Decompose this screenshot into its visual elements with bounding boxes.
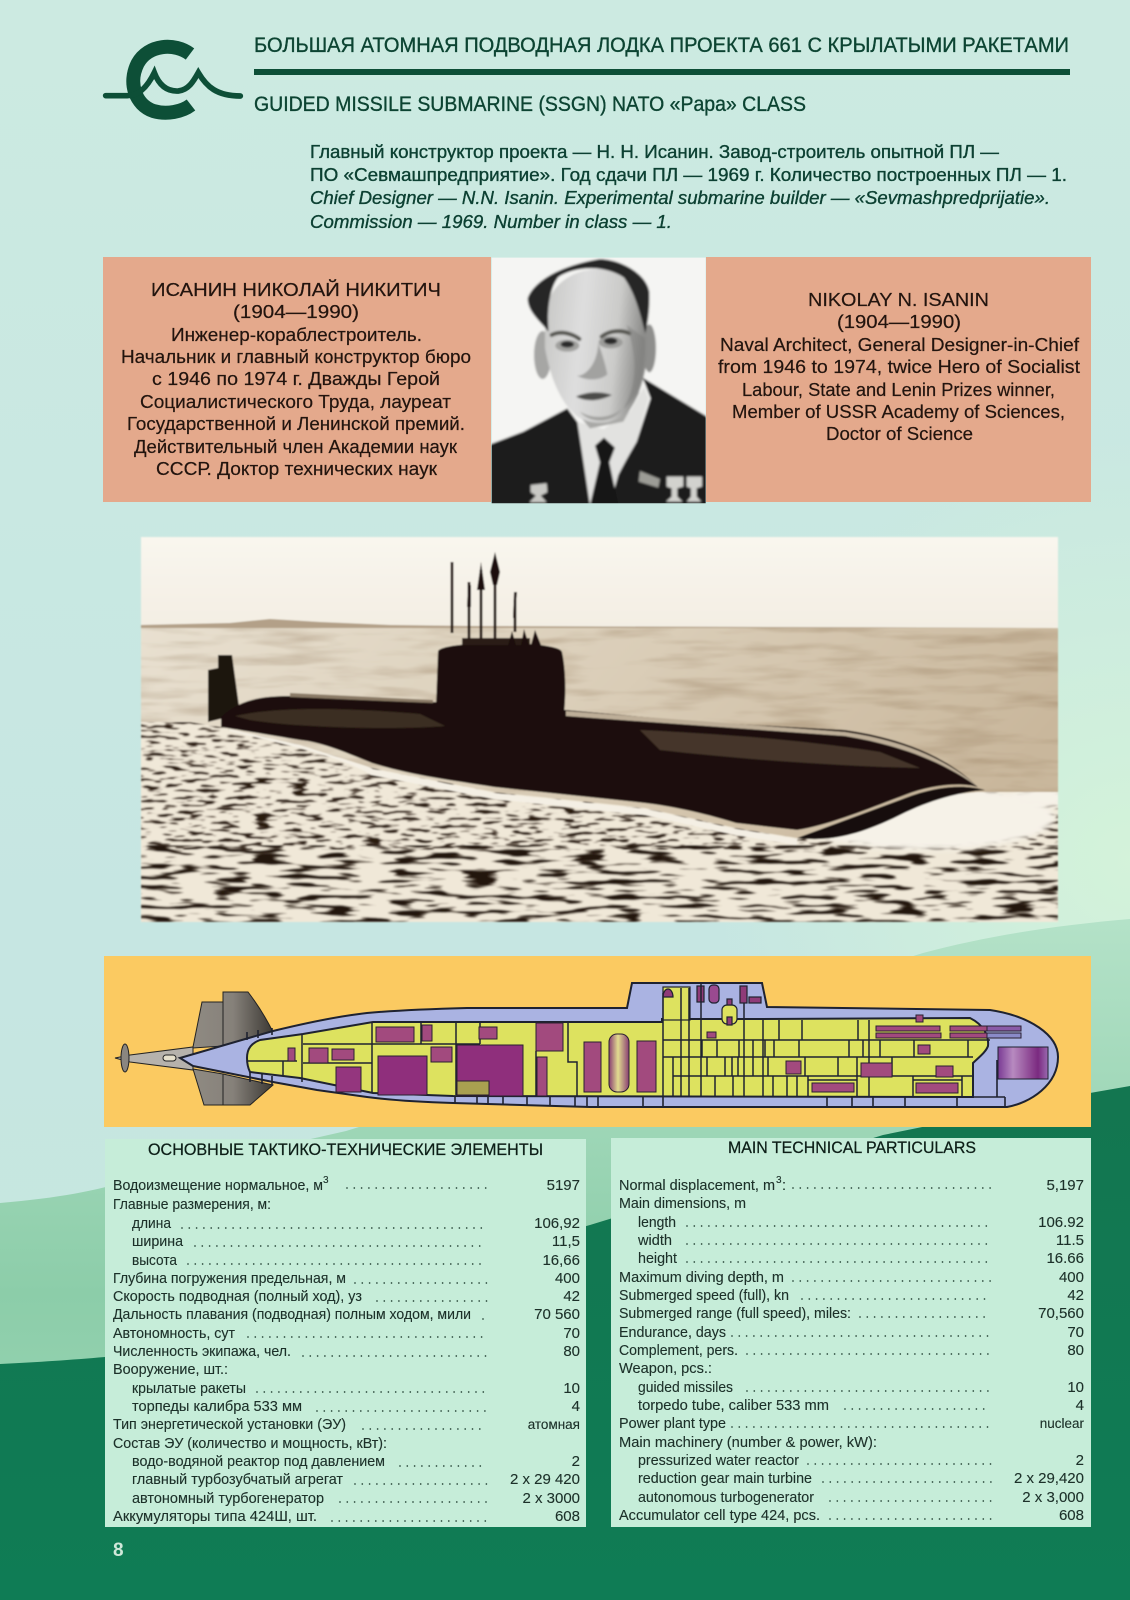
- table: main characteristics in Russian: Автономность, сут: [113, 1326, 235, 1342]
- table: main characteristics in Russian: 80: [563, 1343, 580, 1360]
- compartment grid lines: [248, 983, 990, 1097]
- table: main characteristics in Russian: Численность экипажа, чел.: [113, 1344, 291, 1360]
- table: main characteristics in Russian: 2: [572, 1453, 580, 1470]
- hair: [528, 259, 649, 333]
- table: main characteristics in English: 4: [1076, 1397, 1084, 1414]
- hull: [221, 696, 978, 830]
- table: main characteristics in English: 400: [1059, 1269, 1084, 1286]
- table: main characteristics in English: Submerged speed (full), kn: [619, 1288, 789, 1304]
- table: main characteristics in Russian: водо-водяной реактор под давлением: [132, 1454, 385, 1470]
- table: main characteristics in English: 5,197: [1046, 1177, 1084, 1194]
- table: main characteristics in English: length: [638, 1215, 676, 1231]
- table: main characteristics in Russian: Состав ЭУ (количество и мощность, кВт):: [113, 1436, 387, 1452]
- foam at bow: [795, 786, 1055, 850]
- table: main characteristics in Russian: 42: [563, 1288, 580, 1305]
- table: main characteristics in English: 16.66: [1046, 1250, 1084, 1267]
- table: main characteristics in Russian: крылатые ракеты: [132, 1381, 246, 1397]
- page number: 8: [113, 1540, 124, 1561]
- table: main characteristics in Russian: 2 х 3000: [522, 1490, 580, 1507]
- eyes and brows: [552, 331, 629, 339]
- table: main characteristics in English: autonomous turbogenerator: [638, 1490, 814, 1506]
- text block: project summary: ПО «Севмашпредприятие». Год сдачи ПЛ — 1969 г. Количество построенных ПЛ — 1.: [310, 164, 1067, 185]
- ballast tank dividers: [247, 1028, 1005, 1106]
- table: main characteristics in English: pressurized water reactor: [638, 1453, 799, 1469]
- table: main characteristics in English: nuclear: [1040, 1416, 1085, 1431]
- table: main characteristics in English: 3: [776, 1175, 782, 1186]
- panel: biography in Russian: Инженер-кораблестроитель.: [171, 324, 422, 345]
- table: main characteristics in English: Normal displacement, m: [619, 1178, 775, 1194]
- table: main characteristics in Russian: автономный турбогенератор: [132, 1491, 324, 1507]
- sail (conning tower): [436, 643, 565, 720]
- tie: [590, 438, 618, 505]
- table: main characteristics in English: :: [782, 1178, 786, 1194]
- table: main characteristics in Russian: Аккумуляторы типа 424Ш, шт.: [113, 1509, 317, 1525]
- table: main characteristics in Russian: Дальность плавания (подводная) полным ходом, мили: [113, 1307, 471, 1323]
- table: main characteristics in English: 11.5: [1056, 1232, 1084, 1249]
- pressure hull compartments: [247, 1018, 988, 1097]
- table: main characteristics in English: torpedo tube, caliber 533 mm: [638, 1398, 829, 1414]
- rudder fin: [208, 655, 239, 722]
- table: main characteristics in English: Submerged range (full speed), miles:: [619, 1306, 851, 1322]
- nose and mouth: [576, 343, 607, 379]
- table: main characteristics in English: 106.92: [1038, 1214, 1084, 1231]
- tail fins: [193, 992, 273, 1105]
- table: main characteristics in Russian: 70: [563, 1325, 580, 1342]
- table: main characteristics in English: 42: [1067, 1287, 1084, 1304]
- table: main characteristics in Russian: длина: [132, 1216, 172, 1232]
- tower tubes and capsule: [663, 985, 761, 1025]
- photo: Papa class submarine at sea: [141, 537, 1070, 922]
- table: main characteristics in English: Weapon, pcs.:: [619, 1361, 712, 1377]
- table: main characteristics in English: Main machinery (number & power, kW):: [619, 1435, 877, 1451]
- text block: project summary: Главный конструктор проекта — Н. Н. Исанин. Завод-строитель опытной ПЛ —: [310, 141, 999, 162]
- ears: [534, 331, 551, 379]
- foreground water with dark ripples: [141, 715, 1070, 922]
- table: main characteristics in English: guided missiles: [638, 1380, 733, 1396]
- icon: company logo with C and waves: [106, 47, 240, 113]
- table: main characteristics in Russian: 106,92: [534, 1215, 580, 1232]
- panel: biography in English: (1904—1990): [837, 311, 961, 332]
- heading block: [254, 34, 1070, 116]
- panel: biography in English: Member of USSR Academy of Sciences,: [732, 401, 1065, 422]
- table: main characteristics in Russian: главный турбозубчатый агрегат: [132, 1472, 343, 1488]
- table: main characteristics in English: Maximum diving depth, m: [619, 1270, 784, 1286]
- table: main characteristics in Russian: торпеды калибра 533 мм: [132, 1399, 302, 1415]
- table: main characteristics in Russian: Тип энергетической установки (ЭУ): [113, 1417, 346, 1433]
- table: main characteristics in Russian: 3: [323, 1175, 329, 1186]
- panel: cross-section diagram on yellow: [104, 956, 1091, 1127]
- panel: biography in English: NIKOLAY N. ISANIN: [808, 289, 989, 310]
- table: main characteristics in Russian: Вооружение, шт.:: [113, 1362, 228, 1378]
- shirt and neck: [577, 387, 649, 505]
- title: Russian: БОЛЬШАЯ АТОМНАЯ ПОДВОДНАЯ ЛОДКА ПРОЕКТА 661 С КРЫЛАТЫМИ РАКЕТАМИ: [254, 34, 1069, 57]
- subtitle: English: GUIDED MISSILE SUBMARINE (SSGN) NATO «Papa» CLASS: [254, 93, 806, 116]
- purple equipment blocks: [288, 1015, 1021, 1096]
- leader dots: [687, 1188, 991, 1519]
- outer hull: [180, 983, 1058, 1107]
- icon: propeller and tail cone: [115, 1044, 193, 1072]
- table: main characteristics in Russian: 70 560: [534, 1306, 580, 1323]
- text block: project summary: Commission — 1969. Number in class — 1.: [310, 211, 672, 232]
- sea surface: [141, 628, 1058, 922]
- table: main characteristics in English: 80: [1067, 1342, 1084, 1359]
- table: main characteristics in Russian: [105, 1139, 586, 1527]
- panel: biography in English: [706, 257, 1091, 502]
- panel: biography in Russian: ИСАНИН НИКОЛАЙ НИКИТИЧ: [151, 279, 441, 300]
- panel: biography in English: Labour, State and Lenin Prizes winner,: [742, 379, 1055, 400]
- table: main characteristics in Russian: Скорость подводная (полный ход), уз: [113, 1289, 362, 1305]
- table: main characteristics in English: MAIN TECHNICAL PARTICULARS: [728, 1138, 976, 1157]
- table: main characteristics in English: 70,560: [1038, 1305, 1084, 1322]
- panel: biography in English: Naval Architect, General Designer-in-Chief: [720, 334, 1080, 355]
- table: main characteristics in Russian: Водоизмещение нормальное, м: [113, 1178, 323, 1194]
- table: main characteristics in English: reduction gear main turbine: [638, 1471, 812, 1487]
- panel: biography in Russian: Социалистического Труда, лауреат: [140, 391, 452, 412]
- panel: biography in Russian: Начальник и главный конструктор бюро: [121, 346, 471, 367]
- face: [545, 269, 647, 423]
- table: main characteristics in English: 2 x 3,000: [1022, 1489, 1084, 1506]
- panel: biography in Russian: с 1946 по 1974 г. Дважды Герой: [152, 368, 440, 389]
- table: main characteristics in Russian: 10: [563, 1380, 580, 1397]
- table: main characteristics in English: 70: [1067, 1324, 1084, 1341]
- table: main characteristics in Russian: ОСНОВНЫЕ ТАКТИКО-ТЕХНИЧЕСКИЕ ЭЛЕМЕНТЫ: [148, 1140, 543, 1159]
- panel: biography in Russian: Действительный член Академии наук: [134, 436, 458, 457]
- panel: biography in Russian: Государственной и Ленинской премий.: [127, 413, 465, 434]
- panel: biography in English: Doctor of Science: [826, 423, 973, 444]
- table: main characteristics in English: Endurance, days: [619, 1325, 726, 1341]
- table: main characteristics in English: 2: [1076, 1452, 1084, 1469]
- table: main characteristics in English: 608: [1059, 1507, 1084, 1524]
- suit: [490, 408, 590, 505]
- table: main characteristics in Russian: ширина: [132, 1234, 184, 1250]
- leader dots: [182, 1188, 487, 1521]
- text block: project summary: [310, 141, 1067, 232]
- table: main characteristics in English: Complement, pers.: [619, 1343, 738, 1359]
- table: main characteristics in Russian: 16,66: [542, 1252, 580, 1269]
- panel: biography in Russian: [103, 257, 491, 502]
- bow sonar block: [998, 1047, 1048, 1079]
- reactor cylinder: [609, 1034, 629, 1092]
- table: main characteristics in Russian: 4: [572, 1398, 580, 1415]
- table: main characteristics in Russian: 2 х 29 420: [510, 1471, 580, 1488]
- table: main characteristics in English: Main dimensions, m: [619, 1196, 746, 1212]
- table: main characteristics in English: [611, 1138, 1091, 1527]
- table: main characteristics in Russian: 400: [555, 1270, 580, 1287]
- table: main characteristics in Russian: 608: [555, 1508, 580, 1525]
- panel: biography in Russian: (1904—1990): [233, 301, 359, 322]
- table: main characteristics in English: 10: [1067, 1379, 1084, 1396]
- table: main characteristics in English: width: [637, 1233, 672, 1249]
- foam line along the waterline: [230, 728, 797, 842]
- table: main characteristics in English: Power plant type: [619, 1416, 726, 1432]
- hull highlights: [235, 709, 445, 728]
- panel: biography in English: from 1946 to 1974, twice Hero of Socialist: [718, 356, 1080, 377]
- table: main characteristics in Russian: Глубина погружения предельная, м: [113, 1271, 346, 1287]
- table: main characteristics in English: height: [638, 1251, 677, 1267]
- portrait photo of N. N. Isanin: [490, 255, 710, 505]
- table: main characteristics in Russian: высота: [132, 1253, 178, 1269]
- medals: [529, 483, 547, 502]
- text block: project summary: Chief Designer — N.N. Isanin. Experimental submarine builder — «Sevmashpredprijatie».: [310, 187, 1050, 208]
- panel: biography in Russian: СССР. Доктор технических наук: [156, 458, 438, 479]
- table: main characteristics in Russian: 5197: [547, 1177, 580, 1194]
- table: main characteristics in Russian: Главные размерения, м:: [113, 1197, 271, 1213]
- sky and distant shore: [141, 537, 1058, 629]
- table: main characteristics in Russian: 11,5: [552, 1233, 580, 1250]
- table: main characteristics in English: 2 x 29,420: [1014, 1470, 1084, 1487]
- masts and crew: [452, 562, 515, 643]
- table: main characteristics in Russian: атомная: [528, 1417, 580, 1432]
- table: main characteristics in English: Accumulator cell type 424, pcs.: [619, 1508, 820, 1524]
